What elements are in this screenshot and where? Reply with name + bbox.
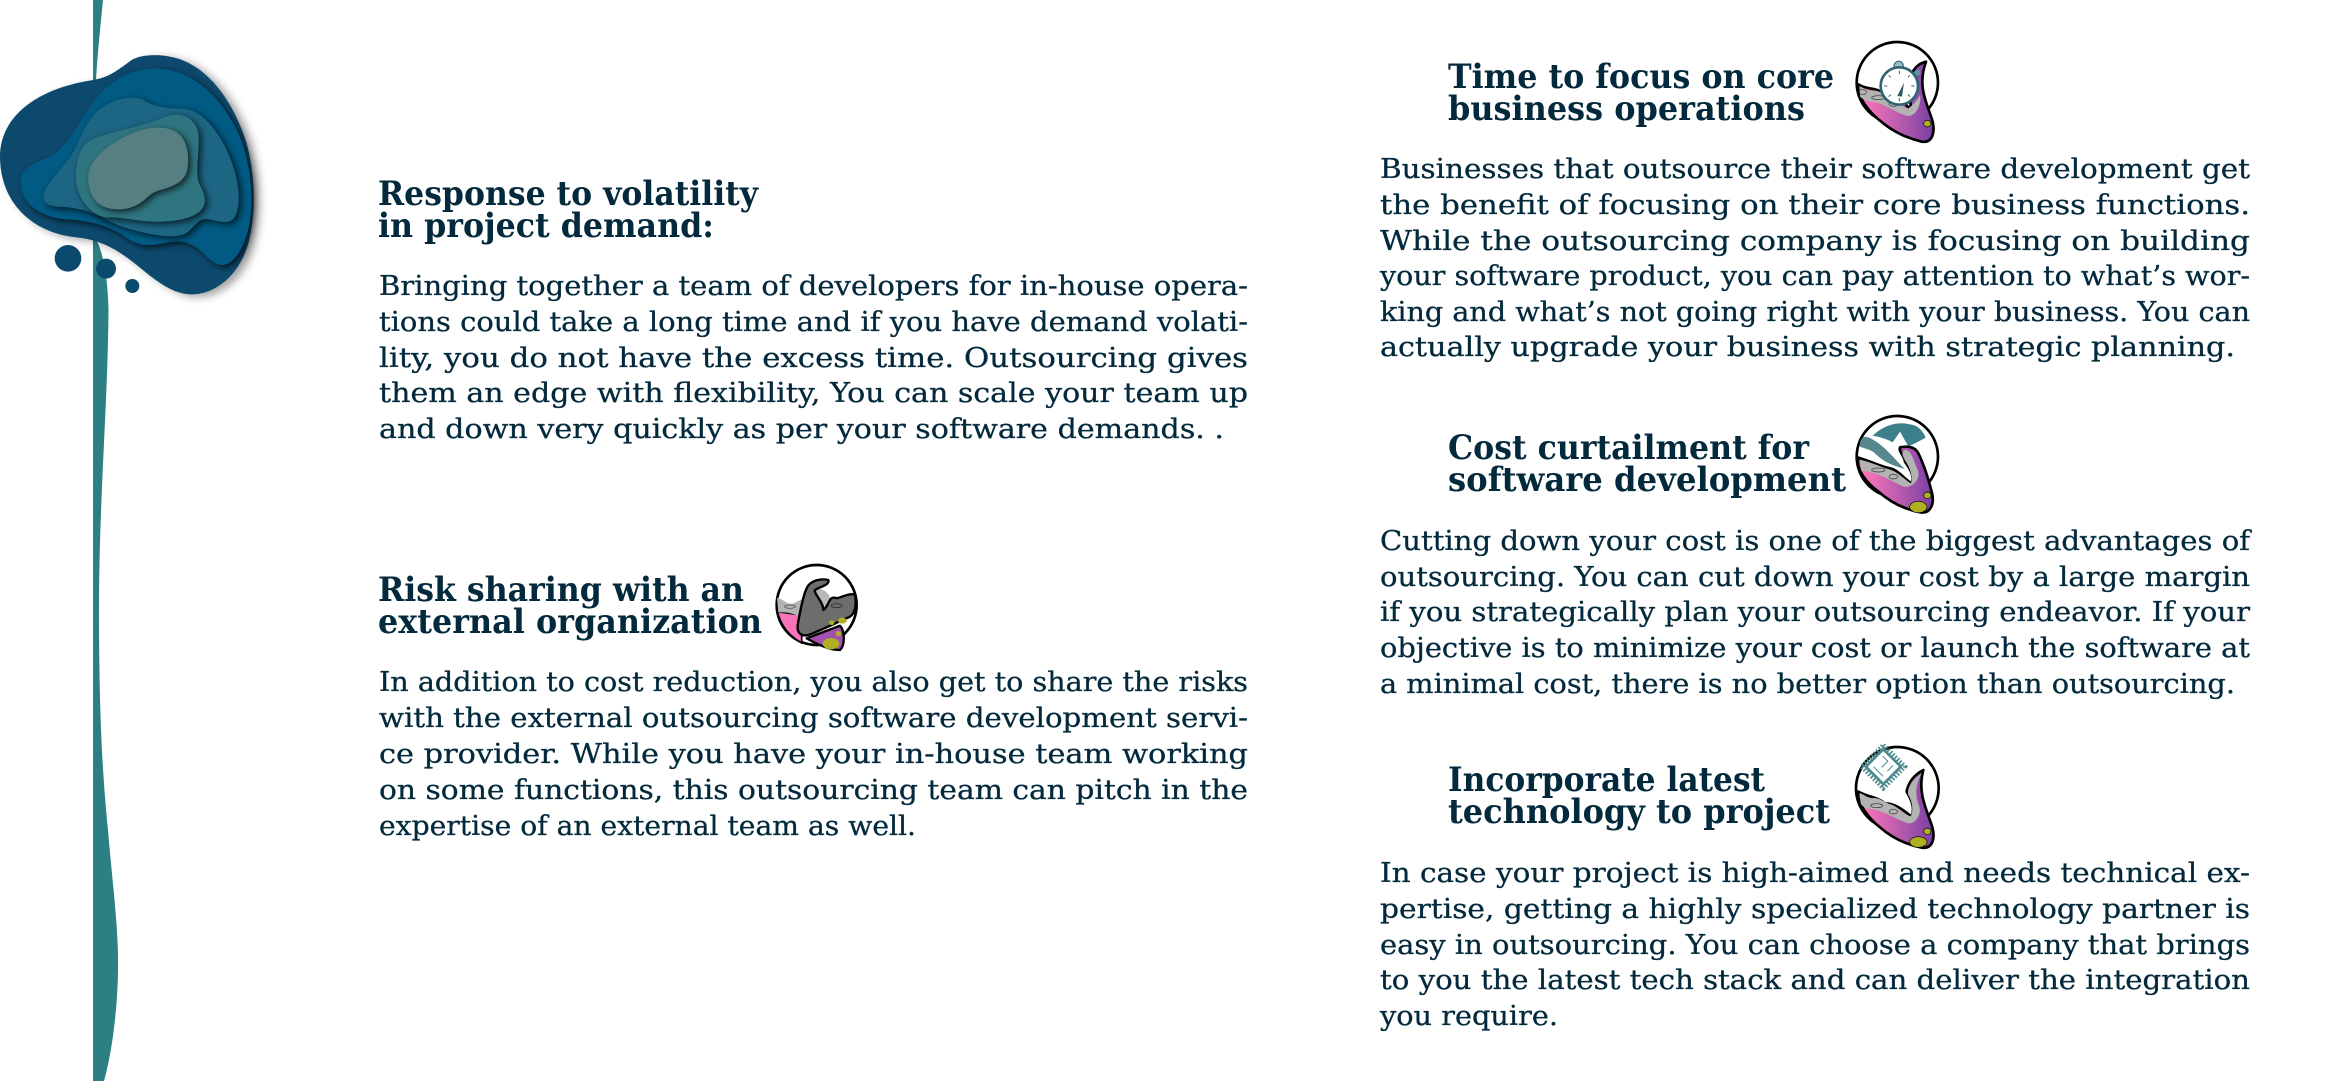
section: time to focus [1379,42,2250,363]
heading: risk sharing: external organization [378,602,762,642]
text block: response to volatility: lity, you do not have the excess time. Outsourcing gives [379,343,1248,374]
text block: time to focus: king and what’s not going right with your business. You can [1380,297,2250,328]
text block: latest technology [1379,858,2250,1032]
heading: latest technology: Incorporate latest [1448,760,1765,800]
heading: response to volatility: in project demand: [378,206,714,246]
text block: response to volatility: them an edge with flexibility, You can scale your team up [379,378,1248,409]
text block: cost curtailment: a minimal cost, there is no better option than outsourcing. [1380,669,2235,700]
text block: risk sharing: with the external outsourcing software development servi- [379,703,1248,734]
text block: risk sharing: expertise of an external team as well. [379,811,916,842]
icon: money [1857,416,1938,513]
heading: time to focus [1448,57,1834,129]
heading: latest technology: technology to project [1448,792,1830,832]
text block: cost curtailment: if you strategically plan your outsourcing endeavor. If your [1380,597,2250,628]
text block: time to focus: actually upgrade your business with strategic planning. [1380,332,2235,363]
text block: latest technology: In case your project is high-aimed and needs technical ex- [1380,858,2250,889]
heading: time to focus: business operations [1448,89,1805,129]
heading: risk sharing: Risk sharing with an [378,570,744,610]
text block: latest technology: you require. [1379,1001,1558,1032]
text block: response to volatility: tions could take a long time and if you have demand volati- [379,307,1248,338]
text block: risk sharing: on some functions, this outsourcing team can pitch in the [379,775,1248,806]
text block: cost curtailment [1380,526,2252,700]
text block: time to focus: While the outsourcing company is focusing on building [1380,226,2250,257]
icon: microchip [1856,745,1939,848]
teal vertical ribbon [93,0,118,1081]
text block: response to volatility: and down very quickly as per your software demands. . [379,414,1224,445]
icon: grey hand [777,565,857,650]
icon: stopwatch [1857,42,1938,142]
text block: response to volatility [379,271,1248,445]
text block: latest technology: to you the latest tech stack and can deliver the integration [1380,965,2250,996]
text block: response to volatility: Bringing together a team of developers for in-house opera- [379,271,1248,302]
text block: cost curtailment: outsourcing. You can cut down your cost by a large margin [1380,562,2250,593]
heading: cost curtailment: software development [1448,460,1846,500]
text block: risk sharing: In addition to cost reduction, you also get to share the risks [379,667,1248,698]
text block: time to focus: the benefit of focusing on their core business functions. [1380,190,2250,221]
text block: time to focus [1379,154,2250,363]
heading: time to focus: Time to focus on core [1448,57,1834,97]
heading: response to volatility [378,174,759,246]
text block: cost curtailment: objective is to minimize your cost or launch the software at [1380,633,2250,664]
text block: risk sharing: ce provider. While you have your in-house team working [379,739,1248,770]
section: cost curtailment [1380,416,2252,700]
heading: response to volatility: Response to volatility [378,174,759,214]
heading: cost curtailment: Cost curtailment for [1448,428,1810,468]
section: risk sharing [378,565,1248,842]
heading: cost curtailment [1448,428,1846,500]
heading: risk sharing [378,570,762,642]
text block: latest technology: pertise, getting a highly specialized technology partner is [1380,894,2250,925]
text block: time to focus: your software product, you can pay attention to what’s wor- [1379,261,2250,292]
heading: latest technology [1448,760,1830,832]
layered paper-cut blob [0,55,254,294]
text block: time to focus: Businesses that outsource their software development get [1380,154,2250,185]
text block: latest technology: easy in outsourcing. You can choose a company that brings [1380,930,2250,961]
text block: risk sharing [379,667,1248,842]
section: response to volatility [378,174,1248,445]
text block: cost curtailment: Cutting down your cost is one of the biggest advantages of [1380,526,2252,557]
section: latest technology [1379,745,2250,1032]
